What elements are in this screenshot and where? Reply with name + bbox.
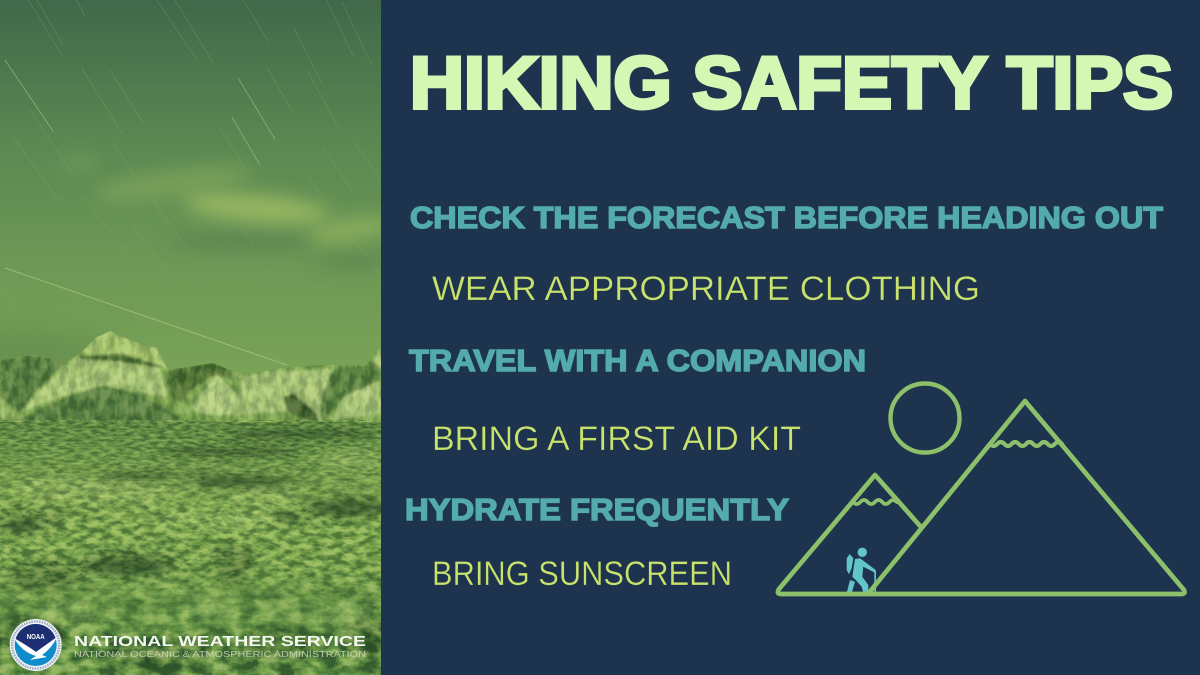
agency name: NATIONAL OCEANIC & ATMOSPHERIC ADMINISTRATION — [74, 650, 366, 659]
meteor trail — [5, 268, 287, 365]
tip: check the forecast: CHECK THE FORECAST BEFORE HEADING OUT — [410, 200, 1163, 235]
sky — [0, 0, 381, 375]
tip: bring a first aid kit: BRING A FIRST AID KIT — [432, 420, 801, 458]
NOAA seal logo — [10, 619, 62, 671]
tip: travel with a companion: TRAVEL WITH A COMPANION — [409, 343, 866, 378]
tip: wear appropriate clothing: WEAR APPROPRIATE CLOTHING — [432, 270, 980, 308]
NOAA wordmark: NOAA — [27, 632, 45, 641]
icon: mountains outline — [778, 401, 1185, 594]
rain streaks — [2, 0, 381, 310]
icon: sun — [890, 384, 960, 452]
photo: rainy desert mountain landscape — [0, 0, 394, 675]
tip: bring sunscreen: BRING SUNSCREEN — [432, 555, 732, 593]
icon: hiker — [847, 548, 876, 593]
title: HIKING SAFETY TIPS — [410, 43, 1173, 124]
tip: hydrate frequently: HYDRATE FREQUENTLY — [405, 492, 789, 527]
desert foreground — [0, 420, 390, 675]
mountain range — [0, 331, 381, 422]
illustration: mountains, sun and hiker — [778, 384, 1185, 594]
National Weather Service wordmark: NATIONAL WEATHER SERVICE — [74, 633, 366, 650]
